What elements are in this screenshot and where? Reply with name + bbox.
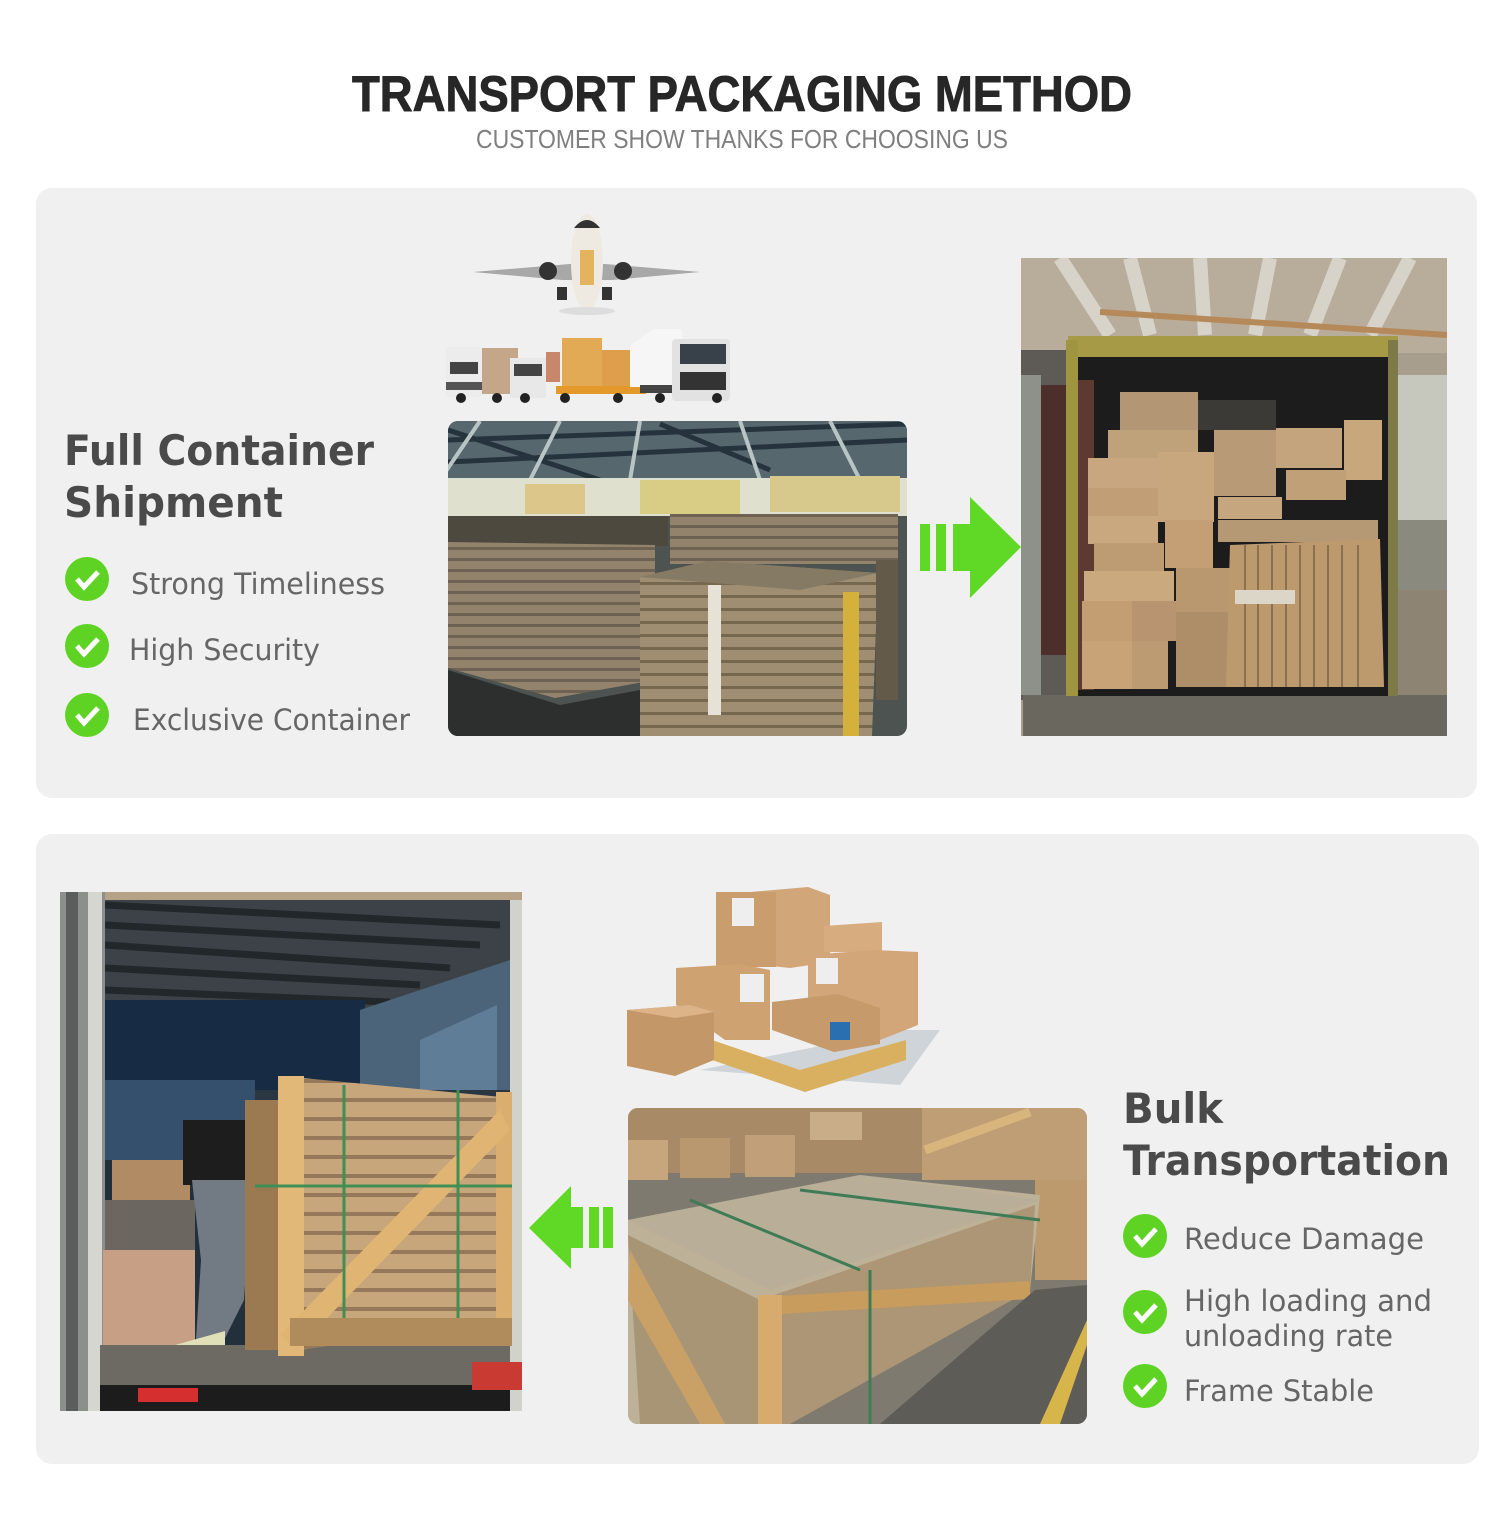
benefit: high loading and unloading rate: High loading and (1184, 1284, 1432, 1318)
panel: full container shipment (36, 188, 1477, 798)
heading: bulk transportation: Transportation (1123, 1136, 1450, 1185)
icon: trucks and boxes (446, 329, 730, 403)
heading: bulk transportation: Bulk (1123, 1084, 1224, 1133)
heading: full container shipment: Shipment (64, 478, 283, 527)
benefit: exclusive container: Exclusive Container (133, 703, 410, 737)
arrow: to container (920, 497, 1021, 598)
benefit: high security: High Security (129, 633, 320, 667)
photo: crate loaded on truck (60, 892, 522, 1411)
benefit: high loading and unloading rate: unloading rate (1184, 1319, 1393, 1353)
benefit: high security (65, 624, 320, 668)
title: TRANSPORT PACKAGING METHOD (352, 66, 1132, 122)
benefit: strong timeliness (65, 557, 385, 601)
photo: stacked flat cartons in warehouse (440, 421, 907, 736)
benefit: exclusive container (65, 693, 410, 737)
heading: full container shipment: Full Container (64, 426, 374, 475)
subtitle: CUSTOMER SHOW THANKS FOR CHOOSING US (476, 124, 1008, 154)
arrow: to truck (529, 1186, 613, 1269)
benefit: strong timeliness: Strong Timeliness (131, 567, 385, 601)
benefit: reduce damage (1123, 1214, 1424, 1258)
benefit: high loading and unloading rate (1123, 1284, 1432, 1353)
heading: full container shipment (64, 426, 374, 527)
benefit: frame stable: Frame Stable (1184, 1374, 1374, 1408)
heading: bulk transportation (1123, 1084, 1450, 1185)
photo: loaded container (1021, 258, 1447, 736)
icon: airplane (473, 214, 700, 315)
photo: shrink-wrapped crate pallets (628, 1108, 1087, 1424)
icon: boxes on pallet (627, 887, 940, 1092)
benefit: reduce damage: Reduce Damage (1184, 1222, 1424, 1256)
benefit: frame stable (1123, 1364, 1374, 1408)
panel: bulk transportation (36, 834, 1479, 1464)
